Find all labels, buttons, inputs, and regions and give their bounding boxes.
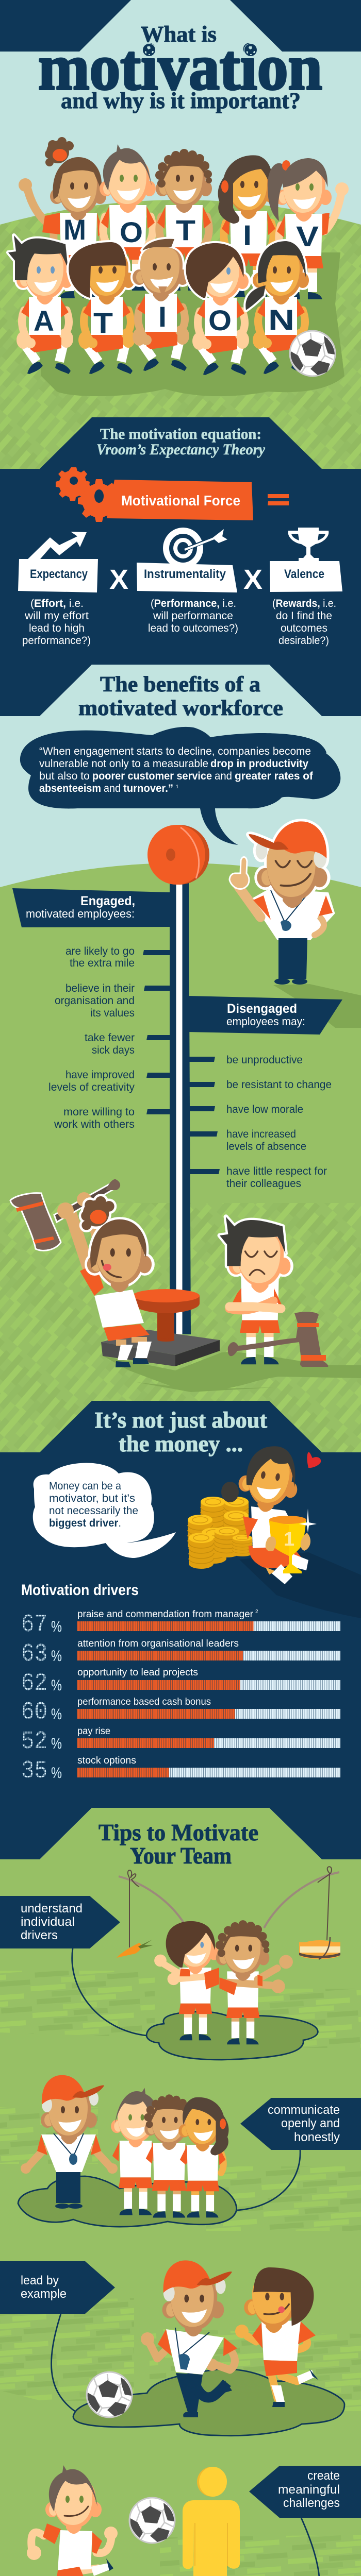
list: engaged employees: believe in their xyxy=(65,982,135,994)
row: cash bonus 60%: % xyxy=(51,1706,62,1723)
title: What is xyxy=(141,22,217,47)
motivational force box xyxy=(107,480,253,520)
equation term: instrumentality: Instrumentality xyxy=(144,567,226,581)
row: pay rise 52%: pay rise xyxy=(77,1726,110,1737)
label arrow xyxy=(0,2261,115,2314)
row: pay rise 52%: 52 xyxy=(21,1728,47,1756)
coach character xyxy=(229,821,333,985)
label arrow xyxy=(240,2098,361,2150)
list: disengaged employees: be resistant to change xyxy=(226,1079,332,1091)
speech bubble: quote: poorer customer service xyxy=(92,770,212,782)
row: stock options 35%: % xyxy=(51,1765,62,1782)
ground patch xyxy=(18,2176,237,2227)
letters MOTIV: M xyxy=(63,213,86,246)
equation term: expectancy: (Effort, i.e. xyxy=(30,598,84,609)
player O xyxy=(100,144,156,291)
row: cash bonus 60% xyxy=(21,1697,340,1726)
equals sign xyxy=(268,494,289,505)
coach and three players xyxy=(21,2075,228,2217)
row: opportunity 62%: 62 xyxy=(21,1670,47,1698)
player M xyxy=(19,137,106,298)
list: engaged employees: have improved xyxy=(65,1069,135,1081)
equation term: expectancy: will my effort xyxy=(24,610,89,622)
icon: trophy xyxy=(288,528,329,561)
yellow training dummy xyxy=(170,2467,240,2576)
background: sky panel xyxy=(0,0,361,469)
list: disengaged employees: have low morale xyxy=(226,1104,303,1115)
speech bubble: quote: drop in productivity xyxy=(210,758,308,770)
title: motivation xyxy=(38,32,322,104)
row: praise 67%: 67 xyxy=(21,1611,47,1639)
heading: tips: Your Team xyxy=(130,1842,232,1869)
row: cash bonus 60%: 60 xyxy=(21,1699,47,1726)
equation term: expectancy: lead to high xyxy=(29,622,85,634)
label arrow: meaningful xyxy=(278,2483,340,2497)
fishing rods, carrot and cake xyxy=(117,1867,340,1959)
panel: tips section background xyxy=(0,1808,361,2576)
panel: motivation equation xyxy=(0,417,361,716)
label arrow: example xyxy=(21,2287,67,2301)
label arrow: individual xyxy=(21,1915,75,1929)
list: disengaged employees: levels of absence xyxy=(226,1141,306,1153)
speech bubble: quote: 1 xyxy=(176,784,179,790)
speech bubble: money: biggest driver. xyxy=(49,1517,121,1529)
speech bubble: quote: greater rates of xyxy=(235,770,314,782)
coach shadow xyxy=(273,984,361,1028)
list: disengaged employees: be unproductive xyxy=(226,1054,303,1066)
row: attention 63%: attention from organisational leaders xyxy=(77,1638,239,1649)
player A xyxy=(8,235,73,374)
letters MOTIV: V xyxy=(296,220,319,252)
label arrow: communicate xyxy=(268,2103,340,2117)
equation term: expectancy xyxy=(18,559,98,647)
row: praise 67% xyxy=(21,1609,340,1639)
player N xyxy=(245,241,309,374)
label arrow: honestly xyxy=(294,2130,340,2144)
heading: motivation equation xyxy=(96,426,266,458)
row: praise 67%: 2 xyxy=(255,1609,258,1615)
row: praise 67%: % xyxy=(51,1618,62,1635)
heading: motivation equation: The motivation equation: xyxy=(100,426,261,443)
label arrow: understand xyxy=(21,1902,83,1916)
speech bubble: money: not necessarily the xyxy=(49,1505,138,1517)
heading: motivation equation: Vroom’s Expectancy Theory xyxy=(96,441,266,458)
heading: tips xyxy=(99,1819,258,1869)
hammer game scene xyxy=(10,1179,361,1392)
equation term: valence: Valence xyxy=(284,567,324,581)
girl and boy reaching xyxy=(154,1920,293,2044)
row: opportunity 62%: opportunity to lead projects xyxy=(77,1667,198,1678)
letters ATION: I xyxy=(158,300,167,333)
letters ATION xyxy=(34,300,294,339)
running coach xyxy=(141,2260,237,2417)
equation term: valence xyxy=(270,561,342,647)
equation term: valence: outcomes xyxy=(281,622,327,634)
team: back row players spelling MOTIV xyxy=(19,137,349,299)
row: opportunity 62%: % xyxy=(51,1677,62,1694)
row: attention 63%: 63 xyxy=(21,1640,47,1668)
speech bubble: quote: “When engagement starts to decline, companies become xyxy=(39,745,311,757)
label arrow: openly and xyxy=(281,2116,340,2130)
player V xyxy=(268,158,349,299)
speech bubble: quote: absenteeism xyxy=(39,783,101,794)
panel: engaged heading: Engaged, xyxy=(80,894,135,908)
motivational force box: Motivational Force xyxy=(121,493,240,509)
tip 3: lead by example xyxy=(0,2260,344,2436)
coin stacks xyxy=(188,1497,252,1569)
speech bubble: money xyxy=(33,1463,176,1558)
letters ATION: N xyxy=(268,303,294,336)
player T xyxy=(69,242,135,374)
speech bubble: quote: but also to xyxy=(39,770,90,782)
ground patch xyxy=(146,2012,318,2060)
heading: benefits: motivated workforce xyxy=(78,697,283,720)
football xyxy=(87,2372,132,2417)
row: pay rise 52% xyxy=(21,1726,340,1756)
row: opportunity 62% xyxy=(21,1667,340,1698)
list: disengaged employees: their colleagues xyxy=(226,1178,301,1190)
running girl xyxy=(235,2267,319,2407)
football xyxy=(290,331,335,376)
label arrow: lead by xyxy=(21,2274,59,2287)
letters ATION: O xyxy=(208,304,232,336)
row: stock options 35% xyxy=(21,1755,340,1785)
equation term: valence: desirable?) xyxy=(278,635,329,647)
football xyxy=(129,2498,175,2543)
heading: benefits: The benefits of a xyxy=(100,673,260,697)
trophy xyxy=(266,1516,310,1573)
multiply sign: X xyxy=(243,564,262,595)
panel: disengaged heading: employees may: xyxy=(226,1015,305,1028)
equation term: instrumentality: will performance xyxy=(153,610,233,622)
row: stock options 35%: 35 xyxy=(21,1757,47,1785)
row: stock options 35%: stock options xyxy=(77,1755,136,1766)
panel: benefits section background xyxy=(0,665,361,1458)
list: engaged employees: the extra mile xyxy=(70,957,135,969)
equation term: valence: (Rewards, i.e. xyxy=(272,598,336,609)
title: and why is it important? xyxy=(61,88,301,113)
tip 1: understand individual drivers xyxy=(0,1867,340,2060)
engaged girl with hammer xyxy=(10,1179,152,1367)
panel: engaged heading: motivated employees: xyxy=(26,907,135,920)
row: attention 63% xyxy=(21,1638,340,1668)
icon: target with arrow xyxy=(163,528,227,569)
equation term: expectancy: Expectancy xyxy=(30,567,88,581)
list: disengaged employees xyxy=(188,1054,332,1190)
row: attention 63%: % xyxy=(51,1648,62,1665)
multiply sign: X xyxy=(109,564,128,595)
letters MOTIV: T xyxy=(176,214,195,246)
base of strength tester xyxy=(101,1289,220,1366)
label arrow: drivers xyxy=(21,1928,58,1942)
list: engaged employees: take fewer xyxy=(85,1032,135,1044)
equation term: instrumentality xyxy=(137,563,238,634)
player O xyxy=(186,243,249,375)
list: engaged employees xyxy=(48,945,170,1130)
icon: heart xyxy=(307,1452,321,1468)
row: praise 67%: praise and commendation from manager xyxy=(77,1609,254,1620)
list: engaged employees: are likely to go xyxy=(65,945,135,957)
trophy: 1 xyxy=(284,1529,294,1550)
top banner xyxy=(0,0,361,52)
kicking boy xyxy=(27,2465,118,2576)
tip 2: communicate openly and honestly xyxy=(18,2075,361,2227)
letters MOTIV: I xyxy=(243,219,252,251)
row: cash bonus 60%: performance based cash bonus xyxy=(77,1697,211,1707)
player I xyxy=(218,155,276,297)
speech bubble: quote: and xyxy=(104,783,121,794)
ground patch xyxy=(73,2369,344,2436)
list: engaged employees: levels of creativity xyxy=(48,1081,135,1093)
list: disengaged employees: have increased xyxy=(226,1128,296,1140)
list: engaged employees: sick days xyxy=(92,1044,135,1056)
label arrow: create xyxy=(307,2469,340,2483)
icon: growth arrow xyxy=(28,532,87,559)
speech bubble: quote: vulnerable not only to a measurable xyxy=(39,758,208,770)
tip 4: create meaningful challenges xyxy=(21,2465,361,2576)
label arrow: challenges xyxy=(283,2496,340,2510)
label arrow xyxy=(249,2466,361,2518)
letters MOTIV xyxy=(63,213,319,252)
list: engaged employees: work with others xyxy=(54,1118,135,1130)
equation term: expectancy: performance?) xyxy=(22,635,91,647)
letters ATION: T xyxy=(93,307,113,339)
panel: disengaged heading xyxy=(188,996,342,1035)
player I xyxy=(133,239,189,371)
list: disengaged employees: have little respect for xyxy=(226,1165,327,1177)
icon: gears xyxy=(56,467,120,522)
panel: disengaged heading: Disengaged xyxy=(227,1002,297,1016)
grass hill with players xyxy=(0,200,361,469)
player T xyxy=(155,149,212,291)
signpost xyxy=(147,825,209,1334)
letters ATION: A xyxy=(34,304,54,337)
heading: tips: Tips to Motivate xyxy=(99,1819,258,1845)
equation term: instrumentality: (Performance, i.e. xyxy=(151,598,236,609)
equation term: instrumentality: lead to outcomes?) xyxy=(148,622,238,634)
heading: not just about the money xyxy=(94,1408,267,1456)
speech bubble: quote: turnover.” xyxy=(123,783,173,794)
heading: benefits xyxy=(78,673,283,720)
woman shadow xyxy=(239,1552,361,1618)
equation term: valence: do I find the xyxy=(276,610,332,622)
team: front row players spelling ATION xyxy=(8,235,335,376)
panel: money section background xyxy=(0,1401,361,1859)
heading: not just about the money: It’s not just about xyxy=(94,1408,267,1433)
speech bubble: quote xyxy=(20,727,340,845)
list: engaged employees: its values xyxy=(90,1007,135,1019)
disengaged boy with hammer xyxy=(220,1217,328,1367)
list: engaged employees: organisation and xyxy=(55,995,135,1007)
speech bubble: money: Money can be a xyxy=(49,1480,121,1492)
label arrow xyxy=(0,1896,120,1948)
bar chart: motivation drivers xyxy=(21,1609,340,1785)
letters MOTIV: O xyxy=(120,216,143,248)
woman with coins and trophy xyxy=(188,1442,321,1584)
heading: not just about the money: the money ... xyxy=(119,1431,243,1456)
row: pay rise 52%: % xyxy=(51,1735,62,1752)
heading: motivation drivers: Motivation drivers xyxy=(21,1582,139,1599)
speech bubble: money: motivator, but it’s xyxy=(49,1493,135,1504)
speech bubble: quote: and xyxy=(215,770,232,782)
list: engaged employees: more willing to xyxy=(63,1106,135,1118)
panel: engaged heading xyxy=(12,888,170,927)
